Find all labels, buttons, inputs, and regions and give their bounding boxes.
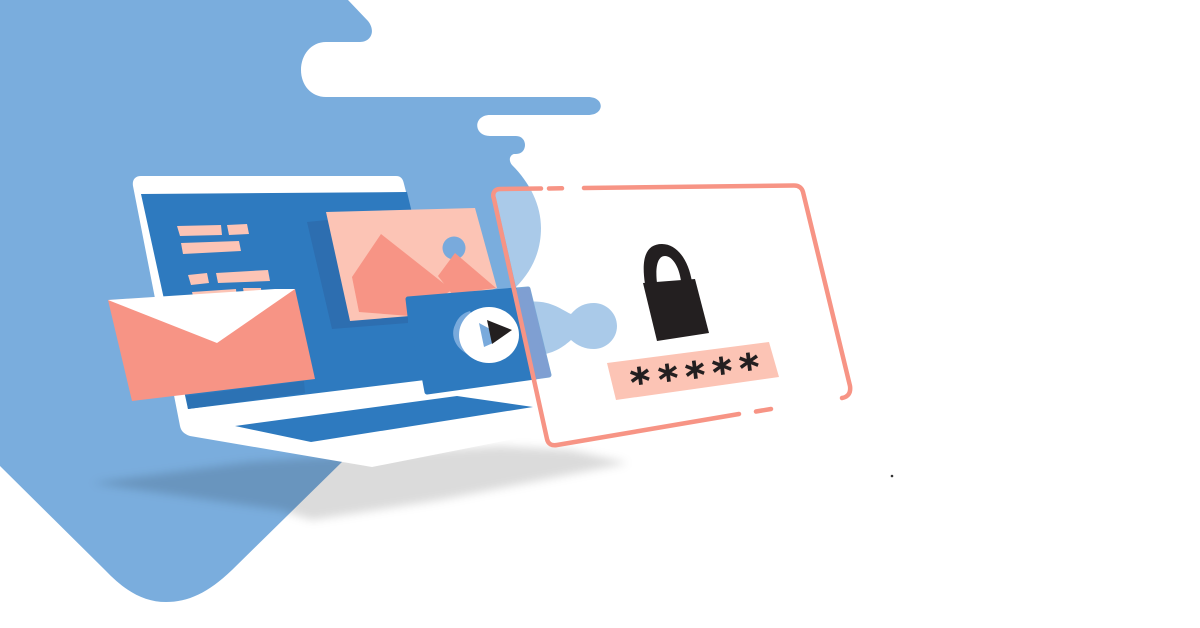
password asterisks bbox=[628, 345, 762, 405]
panel shape bbox=[408, 289, 549, 392]
envelope body bbox=[108, 289, 315, 401]
envelope flap bbox=[108, 289, 295, 343]
laptop screen bbox=[141, 192, 432, 409]
background blue blob bbox=[0, 0, 617, 602]
photo window bbox=[307, 208, 497, 329]
play badge crescent bbox=[453, 311, 480, 356]
stray dot bbox=[891, 475, 893, 477]
photo shadow bbox=[307, 220, 408, 329]
password asterisks: * bbox=[737, 345, 762, 391]
envelope bbox=[108, 289, 315, 401]
photo background bbox=[326, 208, 497, 321]
small mountain bbox=[438, 253, 496, 294]
keyboard bbox=[235, 396, 533, 442]
play badge bbox=[459, 307, 519, 363]
play triangle bbox=[487, 320, 512, 344]
laptop body bbox=[133, 176, 560, 467]
card translucent fill bbox=[494, 185, 851, 446]
ground shadow bbox=[92, 446, 628, 520]
password asterisks: * bbox=[710, 349, 735, 395]
screen corner shade bbox=[186, 381, 305, 409]
password asterisks: * bbox=[628, 359, 653, 405]
large mountain bbox=[352, 234, 452, 316]
text bars on screen bbox=[177, 224, 270, 300]
panel part seen through card bbox=[517, 289, 549, 377]
video panel bbox=[408, 289, 549, 392]
password field bbox=[607, 342, 779, 400]
padlock bbox=[643, 244, 709, 341]
password asterisks: * bbox=[656, 356, 681, 402]
card outline bbox=[493, 186, 850, 445]
play triangle offset bbox=[479, 323, 493, 347]
laptop bbox=[133, 176, 560, 467]
login card bbox=[493, 185, 851, 446]
sun bbox=[442, 236, 466, 260]
password asterisks: * bbox=[683, 353, 708, 399]
